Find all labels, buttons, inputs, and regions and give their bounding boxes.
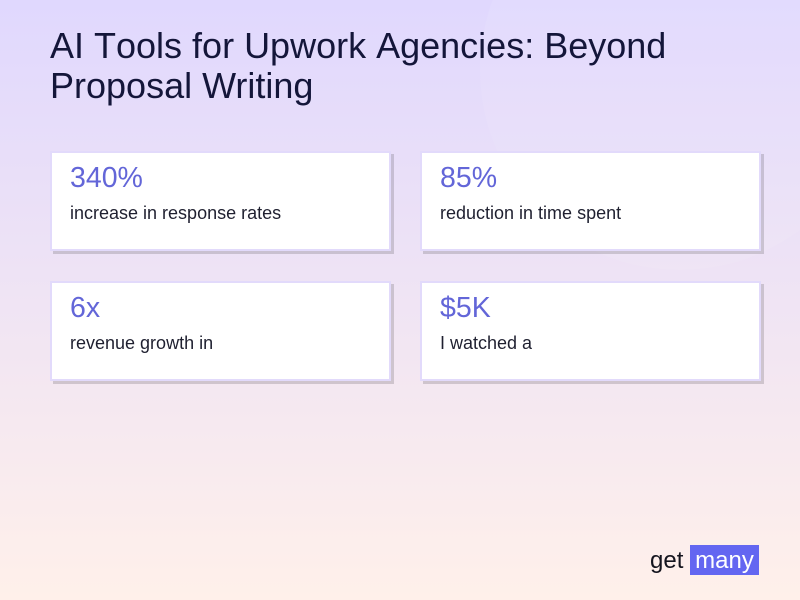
logo word: get: get (650, 547, 683, 574)
stat label: reduction in time spent (440, 203, 621, 223)
stat label: increase in response rates (70, 203, 281, 223)
stat value: 340% (70, 162, 143, 194)
stat value: 85% (440, 162, 497, 194)
background circle (480, 0, 800, 270)
stat value: 6x (70, 292, 100, 324)
stat card: 340% (50, 151, 391, 251)
stat value: $5K (440, 292, 491, 324)
stat label: I watched a (440, 333, 532, 353)
title: AI Tools for Upwork Agencies: Beyond Proposal Writing (50, 25, 666, 106)
stat card: $5K (420, 281, 761, 381)
logo: getmany (650, 545, 759, 575)
stat card: 6x (50, 281, 391, 381)
stat label: revenue growth in (70, 333, 213, 353)
stat card: 85% (420, 151, 761, 251)
logo word: many: many (695, 547, 754, 574)
